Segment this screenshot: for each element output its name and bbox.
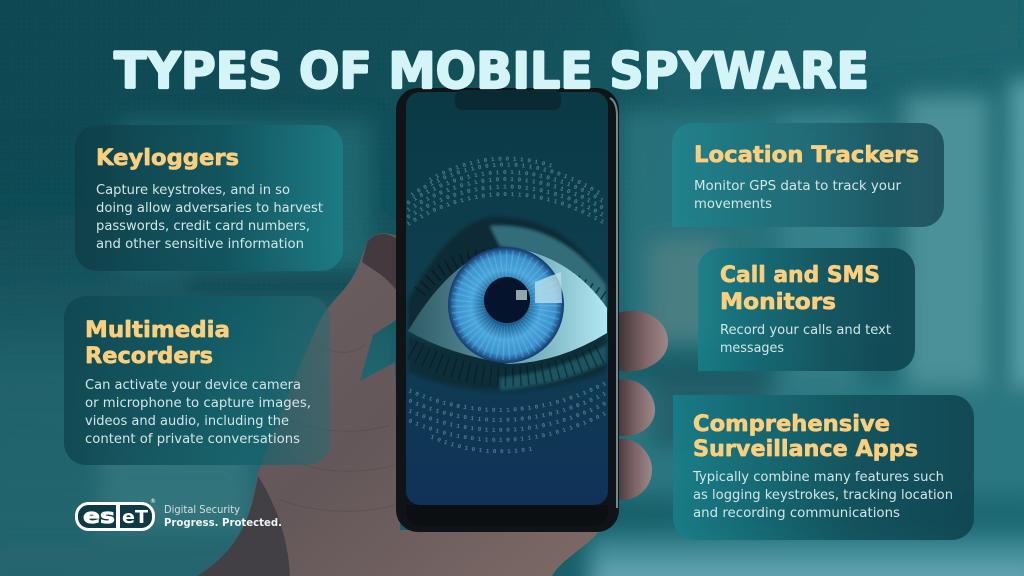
binary digits: 1 1 0 0 1 0 1 1 0 1 0 1 1 0 0 1 1 0 1 0 1 1 0 1 0 0 1 1 0 1 0 1 1 0 0 1 1 — [408, 402, 606, 432]
text: multimedia recorders description: or microphone to capture images, — [85, 395, 311, 411]
logo tagline: Digital Security — [164, 504, 240, 516]
text: multimedia recorders description: videos and audio, including the — [85, 413, 289, 429]
binary digits: 0 1 0 1 1 0 0 1 0 1 1 0 1 1 0 1 0 0 1 1 0 1 1 0 0 1 0 1 1 0 1 0 1 1 0 1 0 — [408, 392, 606, 422]
binary digits: 1 0 1 1 0 1 0 0 1 1 0 1 0 1 1 0 0 1 0 1 1 0 1 0 1 1 0 0 1 0 1 1 0 1 0 1 1 — [408, 382, 606, 412]
phone screen — [406, 92, 608, 505]
heading: call and sms monitors — [720, 263, 880, 315]
text: comprehensive surveillance apps description: Typically combine many features such — [692, 469, 944, 485]
reflection — [535, 272, 562, 303]
logo tagline — [164, 504, 282, 529]
binary digits: 0 1 0 1 1 0 1 0 0 1 1 1 0 1 0 1 1 0 0 1 0 1 1 1 0 0 1 0 1 1 0 1 0 1 1 0 — [406, 170, 603, 204]
finger: index — [618, 311, 668, 371]
heading: multimedia recorders — [85, 318, 230, 369]
binary digits: 0 1 1 0 1 1 0 0 1 0 1 0 1 1 1 0 0 1 1 0 1 0 1 0 0 1 1 0 1 1 0 0 1 0 1 1 0 — [406, 184, 604, 218]
binary digits — [406, 156, 606, 454]
hand holding phone — [197, 233, 668, 576]
text: keyloggers description: passwords, credit card numbers, — [96, 218, 310, 234]
logo: eset — [76, 498, 156, 530]
binary digits: 1 0 1 1 0 1 0 1 1 0 0 1 1 0 1 — [430, 435, 532, 454]
binary digits: 1 1 0 0 1 0 1 1 0 1 0 0 1 1 0 1 0 1 — [428, 156, 552, 182]
heading: comprehensive surveillance apps: Surveillance Apps — [693, 437, 918, 462]
panel: multimedia recorders — [64, 296, 330, 465]
heading: comprehensive surveillance apps: Comprehensive — [693, 412, 890, 437]
logo: eset: es — [83, 504, 115, 528]
upper lid — [408, 216, 606, 330]
text: location trackers description — [694, 178, 901, 212]
eye white — [408, 247, 607, 364]
logo: eset: eT — [122, 507, 149, 528]
panel: location trackers — [672, 123, 944, 227]
finger: ring — [615, 439, 652, 500]
text: keyloggers description: doing allow adversaries to harvest — [96, 200, 323, 216]
heading: comprehensive surveillance apps — [693, 412, 918, 462]
binary digits: 1 1 0 1 0 0 1 1 0 1 1 0 1 0 0 1 0 1 1 0 0 1 1 0 1 0 1 1 0 1 0 0 1 1 0 1 0 — [406, 177, 604, 212]
text: keyloggers description: and other sensitive information — [96, 236, 304, 252]
heading: call and sms monitors: Monitors — [720, 290, 836, 315]
text: keyloggers description: Capture keystrokes, and in so — [96, 182, 290, 198]
text: multimedia recorders description: Can activate your device camera — [85, 377, 301, 393]
text: multimedia recorders description — [85, 377, 311, 447]
eye illustration — [406, 156, 608, 454]
phone bottom bezel — [406, 505, 608, 526]
smartphone — [396, 88, 619, 532]
binary digits: 1 0 0 1 1 0 1 0 1 1 0 0 1 0 1 0 1 1 0 1 0 0 1 1 0 1 0 1 1 0 0 1 0 1 1 0 — [410, 162, 600, 197]
text: keyloggers description — [96, 182, 323, 252]
pupil — [484, 277, 530, 323]
panel: keyloggers — [75, 125, 343, 271]
binary digits: 1 0 1 1 0 0 1 0 1 1 1 0 1 0 0 1 1 0 1 0 1 1 0 0 1 0 1 1 1 0 1 0 0 1 1 0 1 — [406, 192, 604, 226]
binary digits: 0 1 1 0 1 0 1 1 0 0 1 1 0 1 0 0 1 1 1 0 1 0 1 1 0 1 0 0 1 1 0 1 0 1 1 0 1 — [408, 412, 606, 442]
notch — [455, 90, 561, 110]
logo: eset: ® — [150, 498, 156, 505]
logo tagline: Progress. Protected. — [164, 516, 282, 529]
heading: keyloggers: Keyloggers — [96, 146, 239, 171]
text: comprehensive surveillance apps description — [692, 469, 953, 521]
heading: multimedia recorders: Recorders — [85, 344, 213, 369]
heading: location trackers: Location Trackers — [694, 143, 919, 168]
title: TYPES OF MOBILE SPYWARE — [114, 42, 869, 100]
text: call and sms monitors description: Record your calls and text — [720, 322, 891, 338]
lower lid and lashes — [408, 335, 606, 391]
text: location trackers description: Monitor GPS data to track your — [694, 178, 901, 194]
text: comprehensive surveillance apps description: and recording communications — [693, 505, 900, 521]
text: call and sms monitors description — [720, 322, 891, 356]
heading: multimedia recorders: Multimedia — [85, 318, 230, 343]
panel: comprehensive surveillance apps — [673, 395, 974, 540]
text: comprehensive surveillance apps description: as logging keystrokes, tracking location — [693, 487, 953, 503]
iris — [448, 247, 564, 363]
text: call and sms monitors description: messages — [720, 340, 784, 356]
text: location trackers description: movements — [694, 196, 772, 212]
heading: call and sms monitors: Call and SMS — [720, 263, 880, 288]
finger: middle — [616, 379, 655, 436]
text: multimedia recorders description: content of private conversations — [85, 431, 300, 447]
panel: call and sms monitors — [698, 248, 915, 371]
